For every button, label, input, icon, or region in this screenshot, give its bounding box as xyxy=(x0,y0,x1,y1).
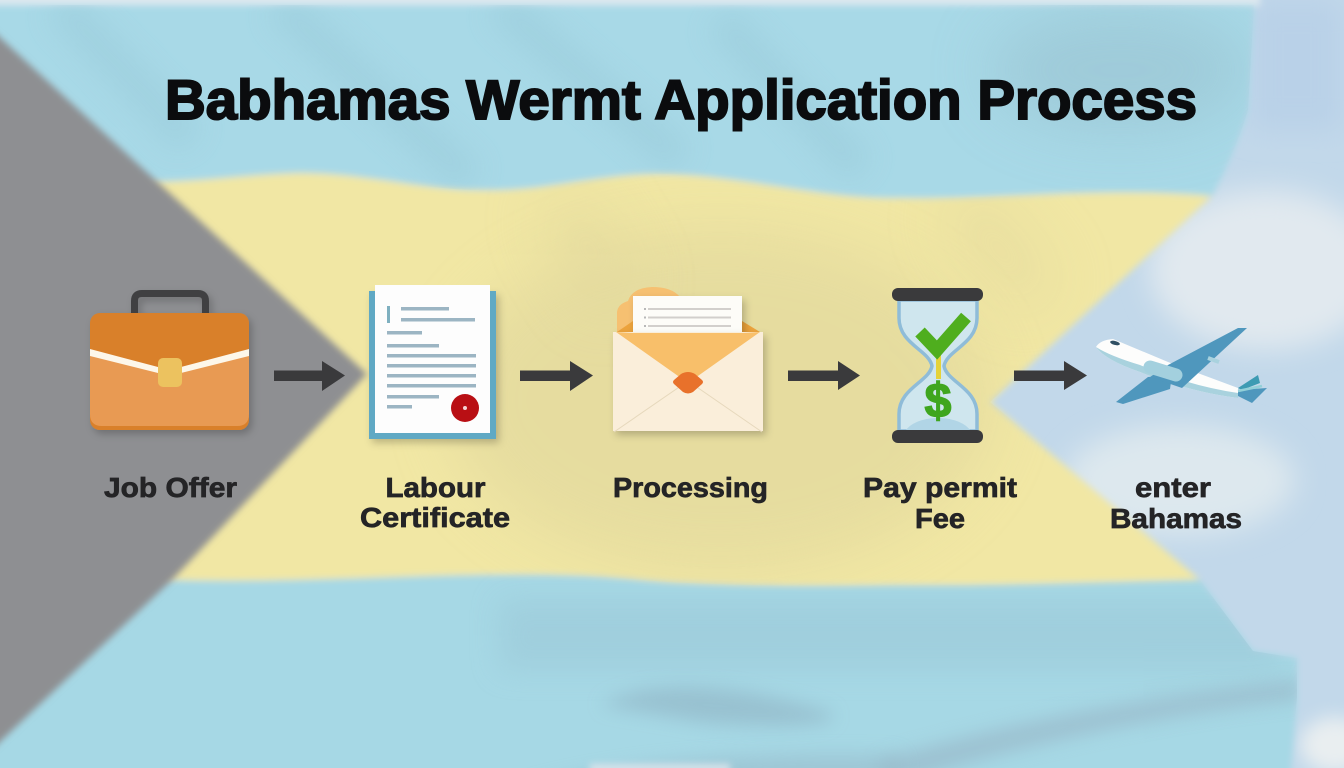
label: pay permit fee: Fee xyxy=(915,503,965,534)
step 5: enter Bahamas xyxy=(1096,328,1267,534)
label: processing: Processing xyxy=(613,472,768,503)
step 2: labour certificate xyxy=(360,285,510,533)
label: enter Bahamas: enter xyxy=(1135,472,1211,503)
label: job offer: Job Offer xyxy=(104,472,237,503)
label: enter Bahamas: Bahamas xyxy=(1110,503,1242,534)
icon: red seal xyxy=(451,394,479,422)
arrow 3 xyxy=(788,361,860,390)
step 1: job offer xyxy=(90,294,249,503)
icon: hourglass with check and dollar: $ xyxy=(925,375,952,428)
shading in the top blue band xyxy=(60,5,1250,180)
step 4: pay permit fee xyxy=(863,288,1017,534)
arrow 2 xyxy=(520,361,593,391)
title: Babhamas Wermt Application Process xyxy=(165,68,1197,131)
label: labour certificate: Certificate xyxy=(360,502,510,533)
icon: open envelope with letter xyxy=(613,287,763,432)
step 3: processing xyxy=(613,287,768,503)
label: labour certificate: Labour xyxy=(386,472,486,503)
arrow 1 xyxy=(274,361,345,391)
arrow 4 xyxy=(1014,361,1087,390)
icon: certificate document xyxy=(369,285,496,439)
icon: hourglass with check and dollar xyxy=(892,288,983,443)
icon: airplane xyxy=(1096,328,1267,404)
icon: briefcase xyxy=(90,294,249,430)
label: pay permit fee: Pay permit xyxy=(863,472,1017,503)
shading in the yellow band xyxy=(484,226,1000,584)
shading in the bottom blue band xyxy=(500,600,1300,768)
